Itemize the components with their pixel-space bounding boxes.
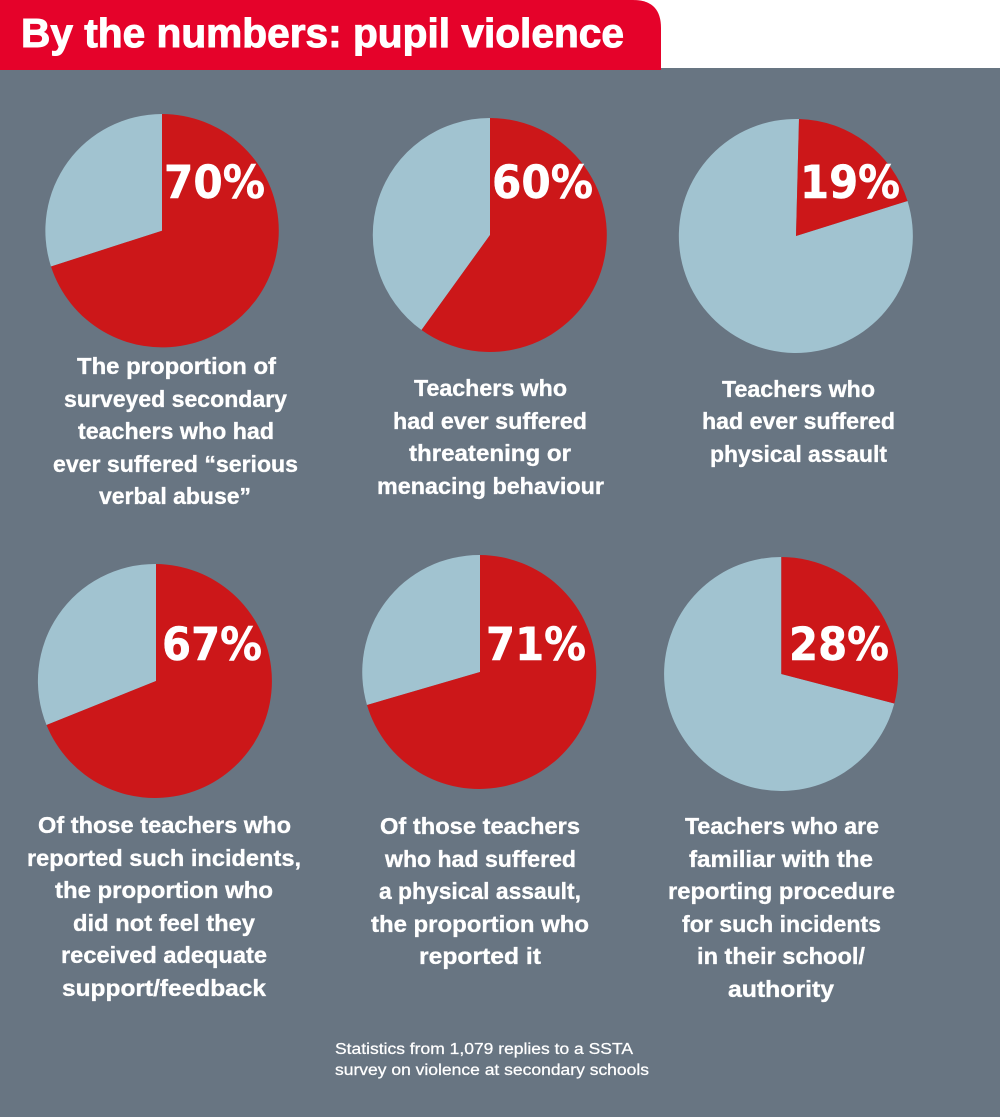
caption: inadequate support: support/feedback bbox=[62, 975, 266, 1001]
caption: inadequate support: Of those teachers who bbox=[38, 812, 291, 838]
caption: familiar with procedure: Teachers who are bbox=[685, 813, 879, 839]
pie chart: 19%: 19% bbox=[800, 156, 900, 209]
source note: Statistics from 1,079 replies to a SSTA bbox=[335, 1041, 634, 1058]
caption: physical assault bbox=[702, 376, 895, 467]
caption: inadequate support: received adequate bbox=[61, 942, 267, 968]
title banner: By the numbers: pupil violence bbox=[21, 10, 624, 56]
panel: inadequate support 67% bbox=[27, 564, 301, 1001]
caption: verbal abuse: ever suffered “serious bbox=[53, 451, 298, 477]
pie chart: 28%: 28% bbox=[789, 618, 889, 671]
source note bbox=[335, 1041, 649, 1079]
caption: verbal abuse: teachers who had bbox=[78, 418, 274, 444]
caption: familiar with procedure: reporting procedure bbox=[668, 878, 895, 904]
pie chart: 28% bbox=[664, 557, 898, 791]
caption: physical assault: physical assault bbox=[710, 441, 887, 467]
pie chart: 70% bbox=[45, 114, 279, 347]
caption: verbal abuse: surveyed secondary bbox=[64, 386, 287, 412]
caption: verbal abuse: The proportion of bbox=[77, 353, 276, 379]
panel: familiar with procedure 28% bbox=[664, 557, 898, 1002]
title banner bbox=[0, 0, 661, 70]
source note: survey on violence at secondary schools bbox=[335, 1062, 649, 1079]
caption: familiar with procedure: authority bbox=[728, 976, 834, 1002]
panel: physical assault 19% bbox=[679, 119, 913, 467]
caption: inadequate support: reported such incidents, bbox=[27, 845, 301, 871]
caption: assault reported: a physical assault, bbox=[379, 878, 581, 904]
caption: inadequate support bbox=[27, 812, 301, 1001]
pie chart: 60% bbox=[373, 118, 607, 352]
pie chart: 67%: 67% bbox=[162, 618, 262, 671]
caption: verbal abuse: verbal abuse” bbox=[99, 483, 251, 509]
panel: threatening behaviour 60% bbox=[373, 118, 607, 499]
caption: assault reported: the proportion who bbox=[371, 911, 589, 937]
caption: physical assault: Teachers who bbox=[722, 376, 875, 402]
caption: familiar with procedure: familiar with the bbox=[689, 846, 873, 872]
caption: familiar with procedure: in their school/ bbox=[697, 943, 866, 969]
caption: threatening behaviour: threatening or bbox=[409, 440, 571, 466]
caption: threatening behaviour: Teachers who bbox=[414, 375, 567, 401]
caption: familiar with procedure bbox=[668, 813, 895, 1002]
pie chart: 60%: 60% bbox=[492, 156, 593, 209]
caption: threatening behaviour bbox=[377, 375, 604, 499]
caption: assault reported: reported it bbox=[419, 943, 541, 969]
caption: inadequate support: the proportion who bbox=[55, 877, 273, 903]
pie chart: 19% bbox=[679, 119, 913, 353]
caption: verbal abuse bbox=[53, 353, 298, 509]
panel: serious verbal abuse 70% bbox=[45, 114, 298, 509]
caption: threatening behaviour: had ever suffered bbox=[393, 408, 587, 434]
caption: assault reported: Of those teachers bbox=[380, 813, 580, 839]
caption: physical assault: had ever suffered bbox=[702, 408, 895, 434]
pie chart: 71% bbox=[362, 555, 596, 789]
panel: assault reported 71% bbox=[362, 555, 596, 969]
caption: threatening behaviour: menacing behaviour bbox=[377, 473, 604, 499]
pie chart: 71%: 71% bbox=[486, 618, 586, 671]
pie chart: 70%: 70% bbox=[164, 156, 265, 209]
caption: familiar with procedure: for such incidents bbox=[682, 911, 881, 937]
caption: assault reported bbox=[371, 813, 589, 969]
caption: assault reported: who had suffered bbox=[384, 846, 576, 872]
caption: inadequate support: did not feel they bbox=[73, 910, 255, 936]
pie chart: 67% bbox=[38, 564, 272, 798]
